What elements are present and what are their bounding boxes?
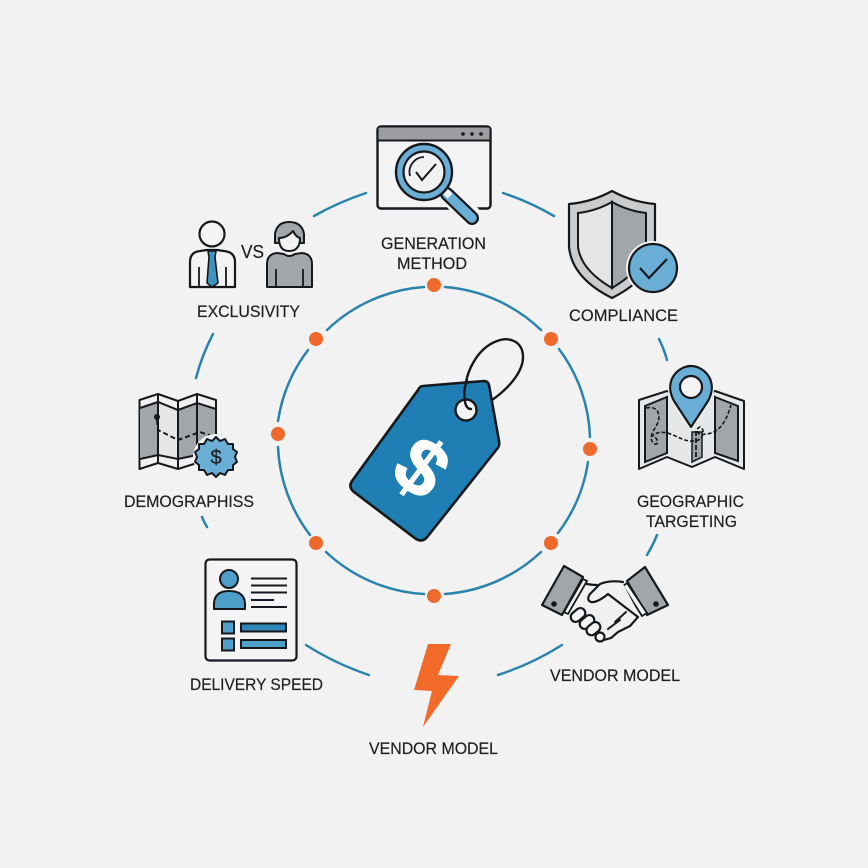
label: compliance: COMPLIANCE (569, 306, 678, 325)
label: generation method: GENERATION (381, 234, 486, 253)
icon: shield with check badge (569, 191, 680, 298)
item: delivery speed (190, 560, 323, 694)
icon: handshake (542, 566, 668, 642)
label: vendor model: VENDOR MODEL (550, 666, 680, 685)
icon: lightning bolt (414, 644, 459, 727)
label: geographic targeting: GEOGRAPHIC (637, 492, 744, 511)
item: generation method (378, 126, 490, 273)
icon: map with dollar badge: $ (210, 447, 222, 469)
central price tag (350, 339, 523, 540)
item: vendor model handshake (542, 566, 680, 685)
item: compliance (569, 191, 680, 325)
label: demographics: DEMOGRAPHISS (124, 492, 254, 511)
label: geographic targeting (637, 492, 744, 531)
text: vs: VS (241, 242, 264, 262)
inner ring arcs (278, 287, 590, 594)
icon: browser with magnifier (378, 126, 490, 218)
item: exclusivity (190, 222, 312, 321)
label: geographic targeting: TARGETING (646, 512, 737, 531)
item: geographic targeting (637, 364, 744, 531)
icon: profile card (206, 560, 296, 660)
icon: map with location pin (639, 364, 744, 469)
outer ring arcs (196, 193, 667, 675)
label: exclusivity: EXCLUSIVITY (197, 302, 300, 321)
ring dots (271, 278, 597, 603)
dollar sign: $ (377, 418, 466, 516)
item: demographics (124, 394, 254, 511)
label: delivery speed: DELIVERY SPEED (190, 675, 323, 694)
label: generation method: METHOD (397, 254, 467, 273)
label: vendor model: VENDOR MODEL (369, 739, 498, 758)
icon: person casual (267, 222, 312, 287)
icon: person in suit (190, 222, 235, 287)
item: vendor model lightning (369, 644, 498, 758)
label: generation method (381, 234, 486, 273)
